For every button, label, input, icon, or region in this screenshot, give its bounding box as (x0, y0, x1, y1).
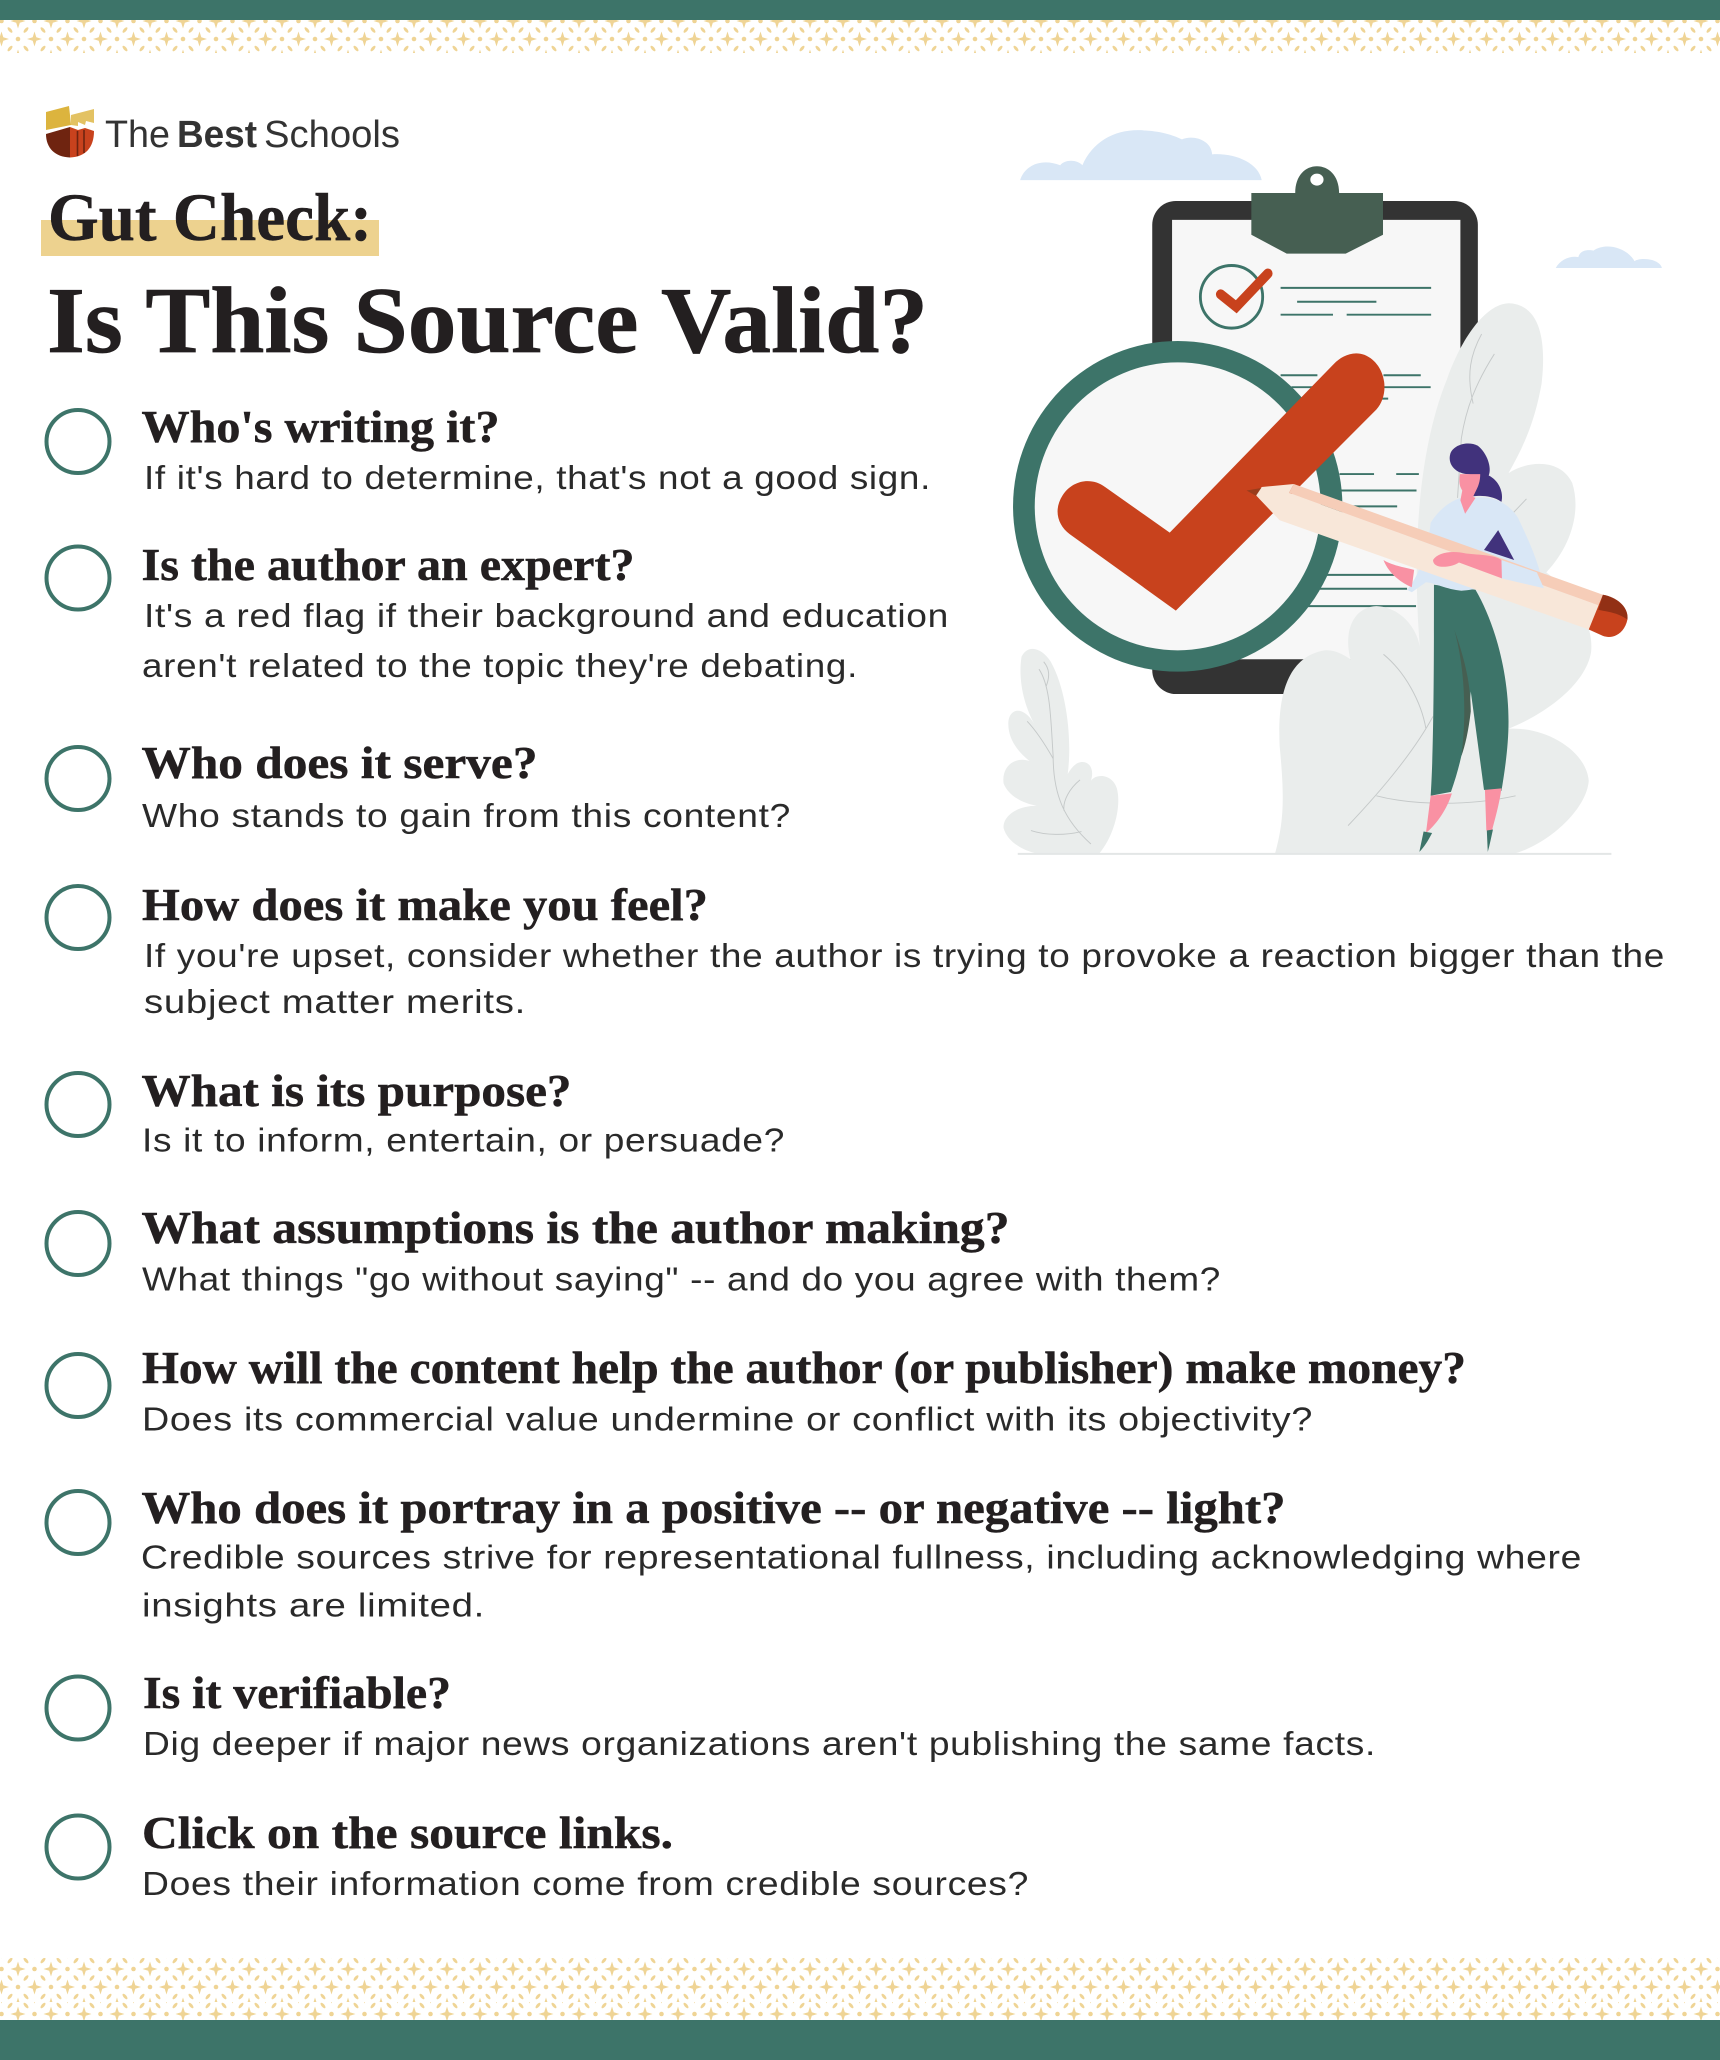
title: Gut Check with highlight: Gut Check: (48, 179, 372, 255)
checkbox (46, 1073, 110, 1136)
description: It's a red flag if their background and education (144, 597, 949, 634)
heading: How will the content help the author (or publisher) make money? (142, 1342, 1466, 1393)
checklist item 6 (46, 1202, 1221, 1298)
illustration: clipboard, check mark and woman with pencil (1003, 130, 1662, 854)
logo icon: shield (46, 106, 94, 158)
description: Credible sources strive for representational fullness, including acknowledging where (141, 1538, 1582, 1576)
description: What things "go without saying" -- and do you agree with them? (142, 1260, 1221, 1298)
logo wordmark (105, 114, 400, 156)
logo wordmark: The (105, 114, 170, 156)
description (144, 937, 1665, 1020)
top decorative band (0, 0, 1720, 53)
description: aren't related to the topic they're debating. (142, 647, 858, 684)
description: subject matter merits. (144, 983, 526, 1020)
checklist item 4 (46, 879, 1665, 1020)
heading: Who does it serve? (142, 737, 538, 788)
logo (46, 106, 400, 158)
checkbox (46, 886, 110, 949)
checkbox (46, 546, 110, 610)
heading: What assumptions is the author making? (142, 1202, 1010, 1253)
checklist item 8 (46, 1482, 1582, 1624)
description: insights are limited. (142, 1586, 485, 1624)
heading: How does it make you feel? (142, 879, 708, 930)
checklist item 2 (46, 539, 949, 684)
checklist item 7 (46, 1342, 1466, 1438)
clipboard (1152, 166, 1478, 694)
description: Does its commercial value undermine or conflict with its objectivity? (142, 1400, 1313, 1438)
checklist item 10 (46, 1807, 1029, 1902)
cloud left (1020, 130, 1262, 180)
big check badge (1013, 341, 1384, 672)
ground line (1018, 852, 1611, 856)
description (142, 597, 949, 684)
heading: What is its purpose? (142, 1065, 572, 1116)
description: Dig deeper if major news organizations aren't publishing the same facts. (143, 1725, 1376, 1762)
cloud right (1556, 247, 1662, 268)
plant large (1275, 303, 1591, 854)
checkbox (46, 1354, 110, 1417)
checkbox (46, 1676, 110, 1740)
checkbox (46, 1212, 110, 1275)
checklist item 3 (46, 737, 791, 834)
title: Is This Source Valid?: Is This Source Valid? (47, 269, 928, 373)
heading: Who does it portray in a positive -- or negative -- light? (142, 1482, 1286, 1533)
checkbox (46, 1491, 110, 1554)
plant small (1003, 649, 1118, 854)
bottom decorative band (0, 1958, 1720, 2060)
arm and sleeve over pencil (1433, 552, 1544, 588)
description: Is it to inform, entertain, or persuade? (142, 1122, 785, 1158)
heading: Is the author an expert? (142, 539, 634, 590)
heading: Click on the source links. (142, 1807, 673, 1858)
heading: Who's writing it? (142, 401, 500, 452)
description: If it's hard to determine, that's not a good sign. (144, 459, 931, 496)
woman figure (1383, 443, 1544, 852)
checkbox (46, 747, 110, 810)
description: Does their information come from credible sources? (142, 1865, 1029, 1902)
description: Who stands to gain from this content? (142, 797, 791, 834)
checkbox (46, 410, 110, 473)
checklist item 1 (46, 401, 931, 496)
description: If you're upset, consider whether the author is trying to provoke a reaction bigger than the (144, 937, 1665, 974)
logo wordmark: Schools (264, 114, 400, 156)
checklist item 9 (46, 1667, 1376, 1762)
logo wordmark: Best (177, 114, 257, 156)
checkbox (46, 1816, 110, 1878)
heading: Is it verifiable? (143, 1667, 451, 1718)
description (141, 1538, 1582, 1624)
pencil (1247, 484, 1628, 637)
checklist item 5 (46, 1065, 785, 1158)
